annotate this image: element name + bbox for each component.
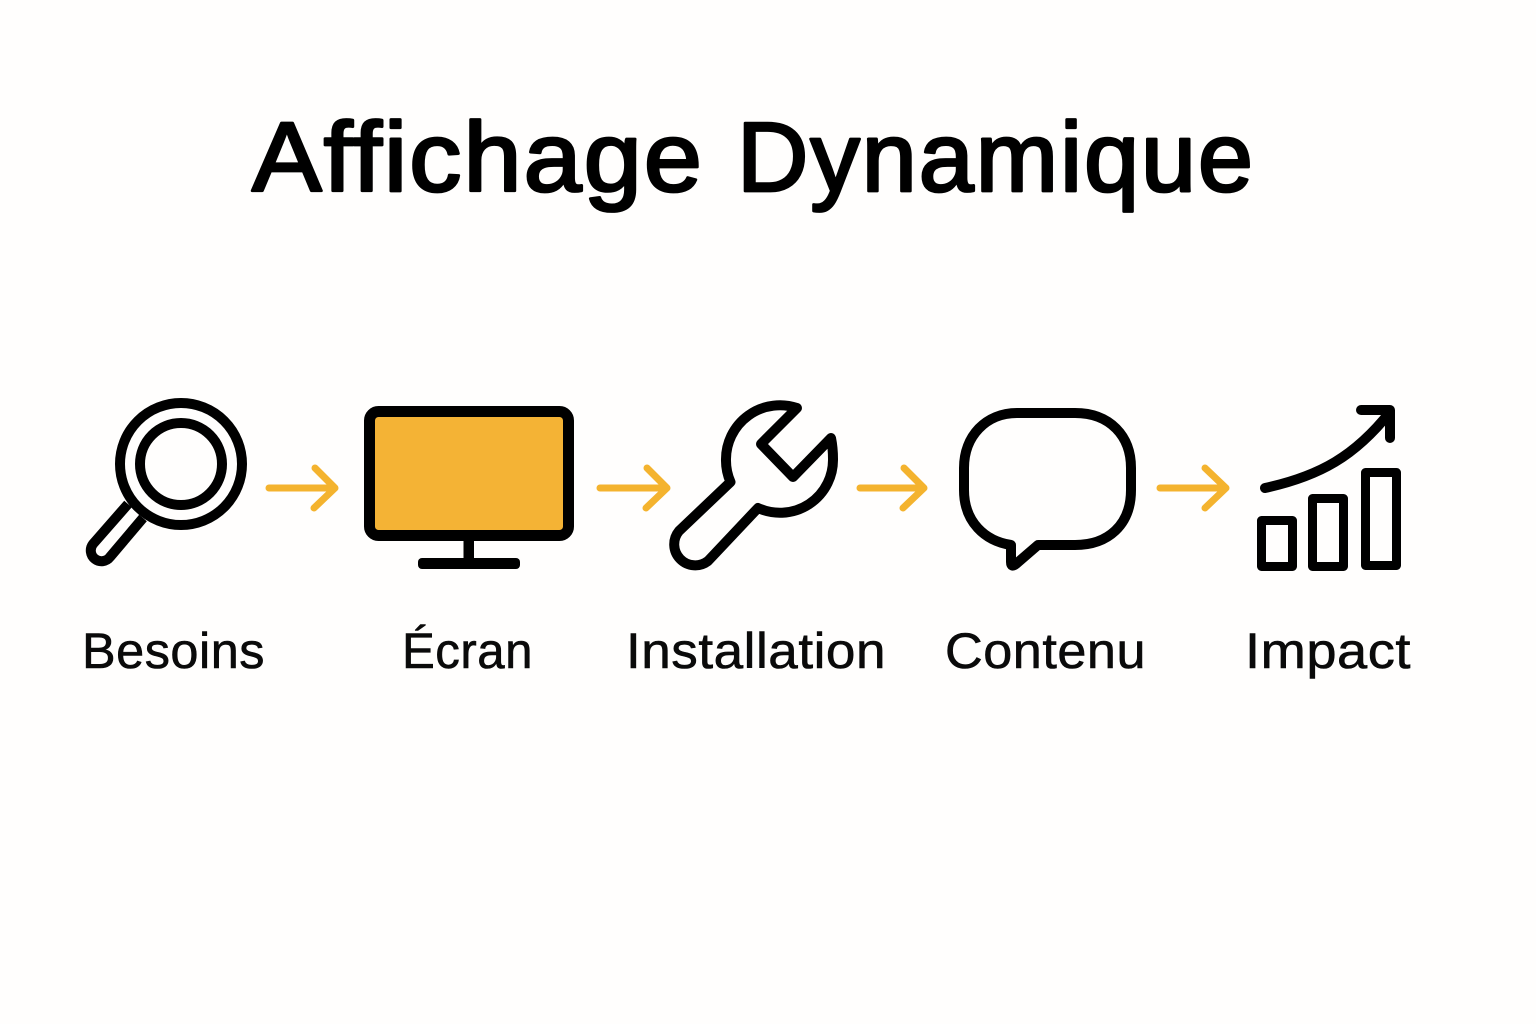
- label: Impact: Impact: [1245, 623, 1411, 679]
- label: Besoins: Besoins: [82, 623, 265, 679]
- arrow: écran to installation: [600, 468, 667, 508]
- arrow: besoins to écran: [269, 468, 335, 508]
- label: Écran: Écran: [402, 623, 533, 679]
- arrow: installation to contenu: [860, 468, 924, 508]
- arrow: contenu to impact: [1160, 468, 1226, 508]
- icon: magnifying glass: [91, 403, 242, 561]
- label: Installation: Installation: [626, 623, 886, 679]
- title: Affichage: [252, 102, 704, 212]
- title: Dynamique: [737, 102, 1255, 212]
- icon: growth chart: [1262, 410, 1396, 566]
- label: Contenu: Contenu: [945, 623, 1146, 679]
- icon: wrench: [674, 405, 833, 565]
- title: [252, 102, 1255, 212]
- icon: speech bubble: [964, 413, 1131, 566]
- icon: screen: [370, 412, 568, 569]
